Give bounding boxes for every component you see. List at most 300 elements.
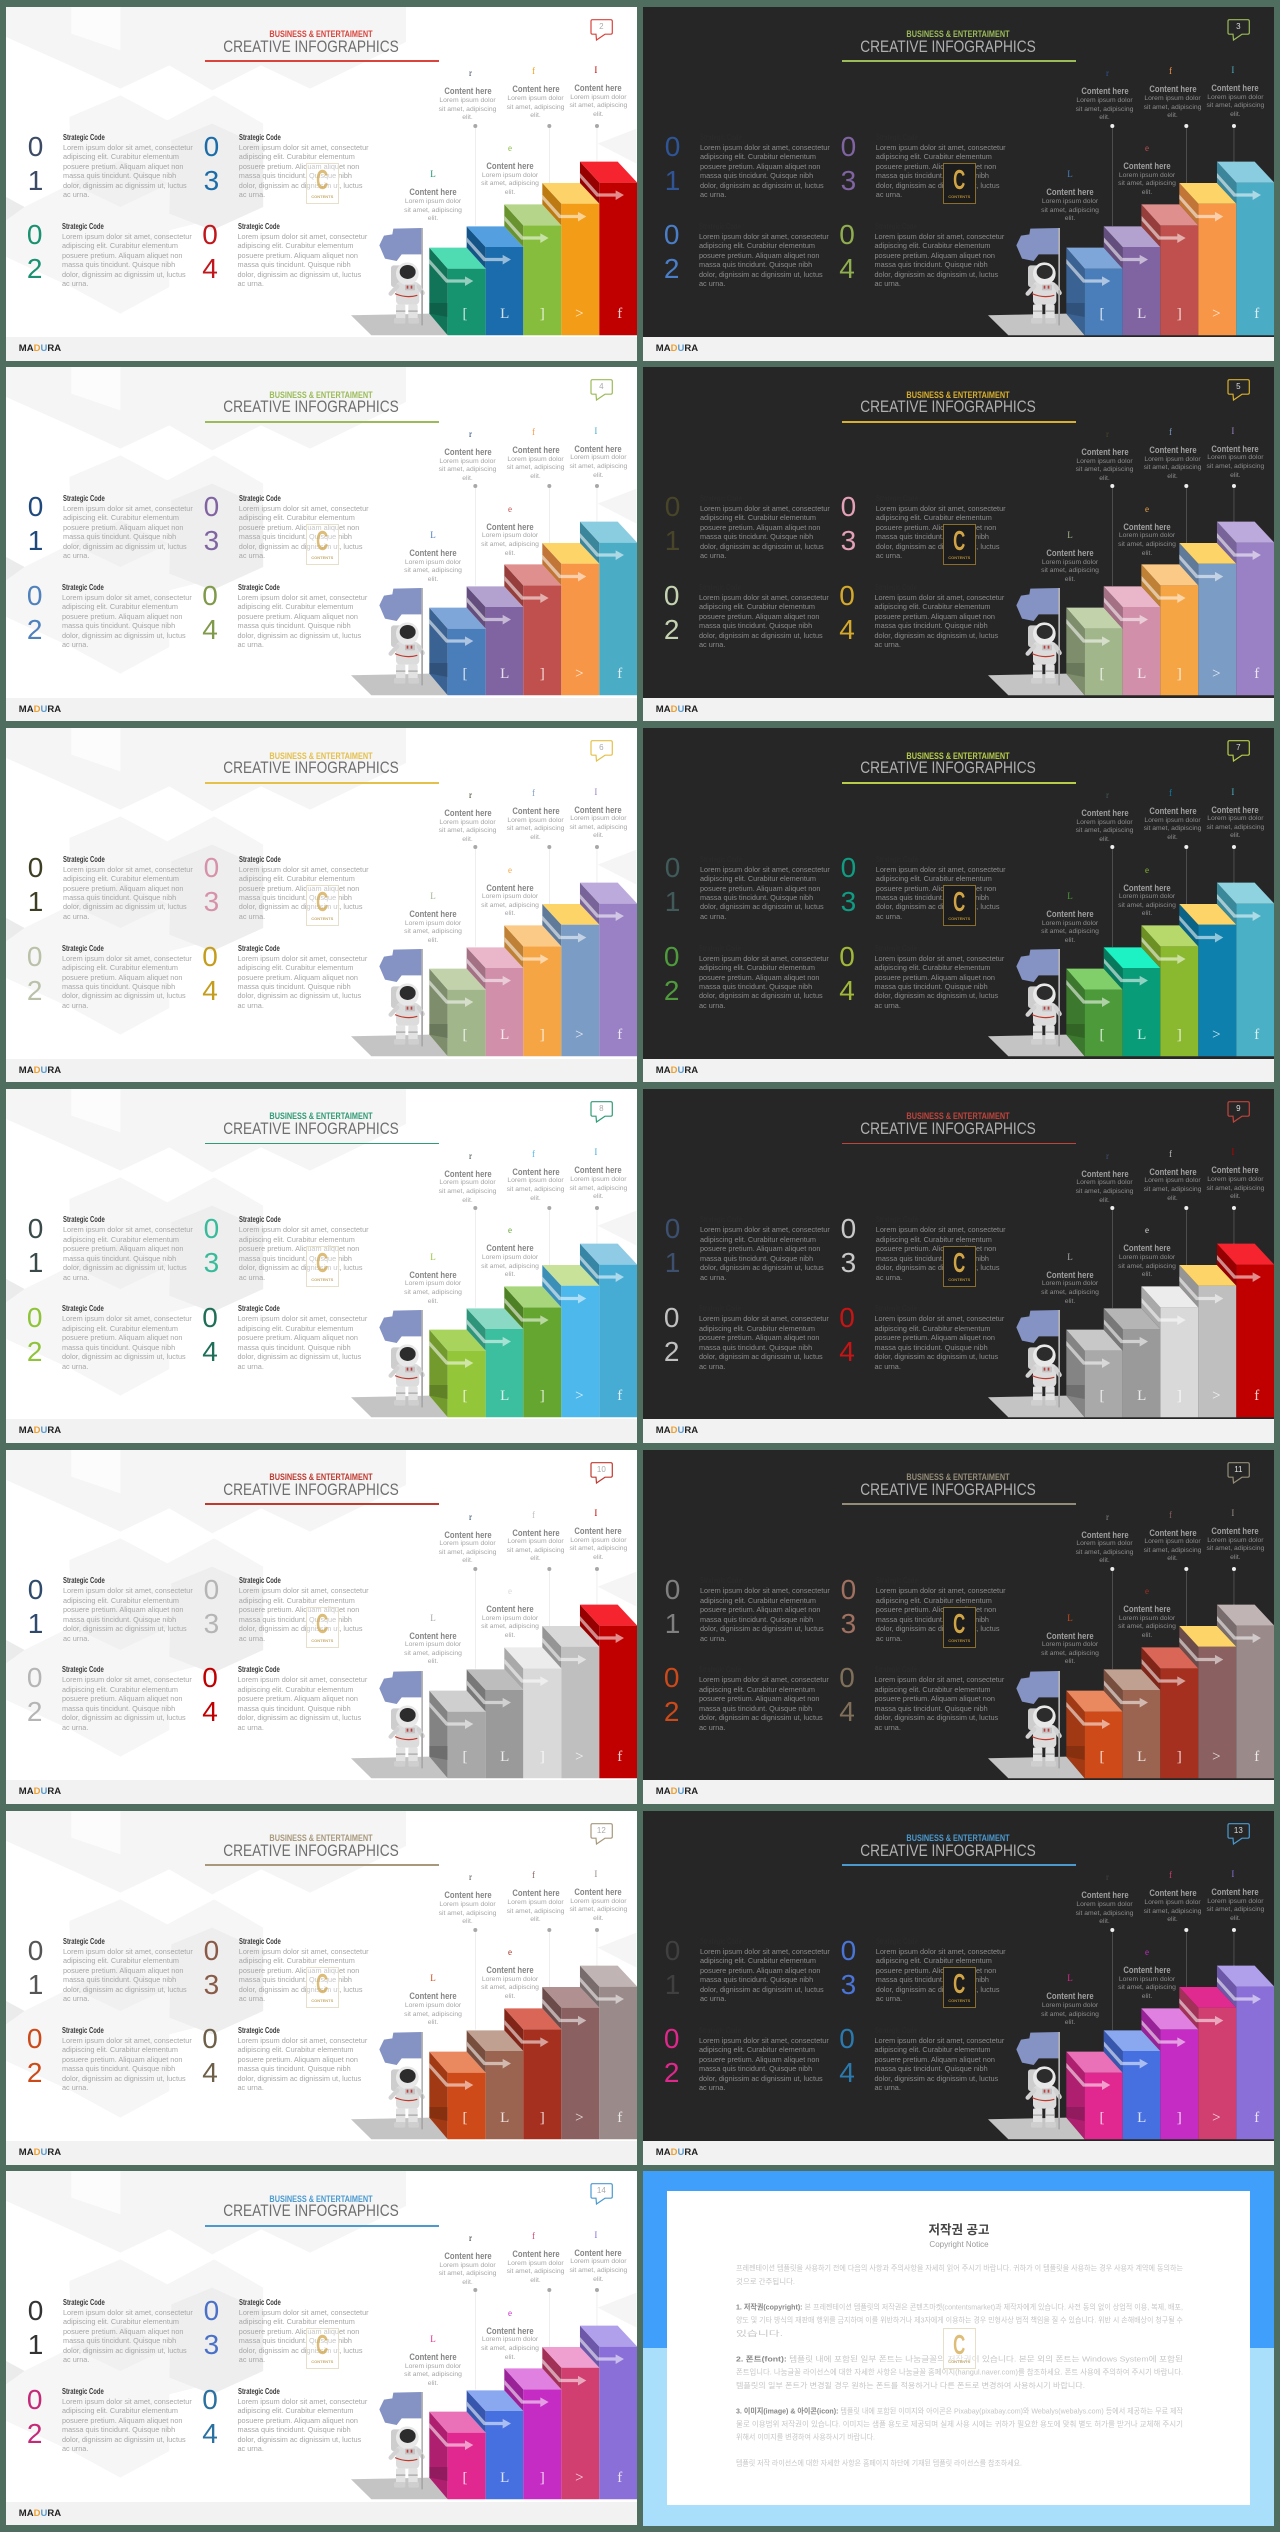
callout 1: Content here xyxy=(409,187,457,197)
text block 03 xyxy=(239,133,369,199)
text block 04 xyxy=(874,222,1004,288)
text block 01 xyxy=(63,2298,213,2365)
callout 1: Content here xyxy=(409,1270,457,1280)
number 01 xyxy=(658,1934,688,2002)
text block 02: dolor, dignissim ac dignissim ut, luctus xyxy=(699,991,823,1000)
number 04 xyxy=(195,579,225,647)
text block 02: massa quis tincidunt. Quisque nibh xyxy=(62,1343,175,1352)
watermark: C xyxy=(316,1608,328,1639)
callout 2: elit. xyxy=(462,2279,473,2286)
callout 4 xyxy=(496,427,576,482)
page number bubble: 8 xyxy=(599,1104,604,1113)
number 02: 2 xyxy=(664,1696,679,1727)
text block 03: ac urna. xyxy=(239,1634,265,1642)
number 02: 0 xyxy=(664,2023,679,2054)
callout 5: sit amet, adipiscing xyxy=(1206,1906,1264,1913)
text block 03 xyxy=(239,1937,389,2004)
number 03: 0 xyxy=(841,491,856,522)
callout 2: r xyxy=(469,1151,472,1161)
text block 01: Lorem ipsum dolor sit amet, consectetur xyxy=(700,865,830,874)
callout 1 xyxy=(1041,169,1099,222)
callout 3 xyxy=(1118,143,1176,196)
panel: slide 7 xyxy=(643,728,1274,1082)
text block 01: posuere pretium. Aliquam aliquet non xyxy=(63,162,183,171)
callout 2: sit amet, adipiscing xyxy=(439,466,496,473)
footer: MADURA xyxy=(656,2147,698,2158)
text block 01: Lorem ipsum dolor sit amet, consectetur xyxy=(700,1947,830,1956)
stair chart with astronaut xyxy=(643,728,1274,1082)
text block 03: Lorem ipsum dolor sit amet, consectetur xyxy=(876,143,1006,152)
notice text: 위해서 이미지를 변경하여 사용하시기 바랍니다. xyxy=(736,2432,875,2442)
text block 02: posuere pretium. Aliquam aliquet non xyxy=(62,2055,182,2064)
bar icons: > xyxy=(1212,1749,1221,1765)
text block 02: dolor, dignissim ac dignissim ut, luctus xyxy=(699,1352,823,1361)
callout 4: sit amet, adipiscing xyxy=(1144,464,1201,471)
callout 1: Lorem ipsum dolor xyxy=(1042,2002,1098,2009)
number 04: 4 xyxy=(202,2057,218,2088)
number 04 xyxy=(195,2022,225,2090)
watermark xyxy=(306,524,338,565)
callout 2 xyxy=(428,1512,508,1566)
callout 2: r xyxy=(469,2233,472,2243)
callout 1: Content here xyxy=(1046,909,1094,919)
text block 02: dolor, dignissim ac dignissim ut, luctus xyxy=(699,631,823,640)
bar icons xyxy=(455,1027,636,1045)
text block 03: dolor, dignissim ac dignissim ut, luctus xyxy=(239,1624,362,1633)
callout 4: f xyxy=(532,788,535,798)
callout 5: elit. xyxy=(1230,472,1241,479)
callout 4: elit. xyxy=(1167,1916,1178,1923)
callout 4: elit. xyxy=(1167,473,1178,480)
callout 3 xyxy=(1107,1225,1187,1280)
callout 3: Lorem ipsum dolor xyxy=(482,1254,538,1261)
number 01: 0 xyxy=(665,1213,680,1244)
panel: slide 4 xyxy=(6,367,637,721)
callout 2: sit amet, adipiscing xyxy=(439,1188,496,1195)
callout 5: I xyxy=(594,1508,597,1518)
text block 01 xyxy=(700,1576,850,1643)
text block 03 xyxy=(239,2298,389,2365)
title xyxy=(842,388,1076,422)
text block 01: dolor, dignissim ac dignissim ut, luctus xyxy=(63,542,187,551)
callout 3: Lorem ipsum dolor xyxy=(482,2336,538,2343)
text block 04: adipiscing elit. Curabitur elementum xyxy=(238,241,354,250)
number 03: 0 xyxy=(204,1574,219,1605)
text block 02: posuere pretium. Aliquam aliquet non xyxy=(699,1694,819,1703)
text block 01 xyxy=(63,1576,213,1643)
page number bubble: 9 xyxy=(1236,1104,1241,1113)
text block 02: posuere pretium. Aliquam aliquet non xyxy=(699,612,819,621)
number 04: 0 xyxy=(839,580,855,611)
callout 3: elit. xyxy=(505,550,515,557)
text block 01: ac urna. xyxy=(700,1994,726,2003)
callout 1: sit amet, adipiscing xyxy=(404,1289,462,1296)
footer xyxy=(6,1780,637,1804)
text block 04: dolor, dignissim ac dignissim ut, luctus xyxy=(238,631,361,640)
watermark xyxy=(306,1246,338,1287)
text block 01: ac urna. xyxy=(700,912,726,921)
footer xyxy=(643,2141,1274,2165)
callout 4: f xyxy=(1169,1870,1172,1880)
watermark: CONTENTS xyxy=(311,916,333,921)
page number bubble xyxy=(590,1101,614,1123)
callout 1: Content here xyxy=(409,548,457,558)
number 04: 0 xyxy=(202,2384,218,2415)
text block 03: posuere pretium. Aliquam aliquet non xyxy=(239,523,359,532)
number 04: 4 xyxy=(202,614,218,645)
number 01: 1 xyxy=(28,165,43,196)
callout 5: Lorem ipsum dolor xyxy=(570,1537,627,1544)
callout 1: L xyxy=(1067,1973,1073,1983)
text block 01: dolor, dignissim ac dignissim ut, luctus xyxy=(700,1624,824,1633)
number 02: 0 xyxy=(664,219,679,250)
text block 04: posuere pretium. Aliquam aliquet non xyxy=(238,1333,358,1342)
number 02: 0 xyxy=(664,580,679,611)
text block 04: adipiscing elit. Curabitur elementum xyxy=(874,963,990,972)
text block 02: Strategic Code xyxy=(699,583,741,592)
watermark xyxy=(943,885,976,926)
number 03: 0 xyxy=(204,131,219,162)
callout 1: sit amet, adipiscing xyxy=(404,2371,462,2378)
text block 01: ac urna. xyxy=(63,551,89,560)
callout 4: Content here xyxy=(1149,1888,1196,1898)
text block 01: Strategic Code xyxy=(63,1576,105,1585)
text block 01 xyxy=(63,1937,213,2004)
callout 2: r xyxy=(1106,68,1109,78)
page number bubble xyxy=(1227,379,1251,401)
text block 04: massa quis tincidunt. Quisque nibh xyxy=(238,2425,351,2434)
bar icons xyxy=(455,1388,636,1406)
callout 4: f xyxy=(532,66,535,76)
watermark xyxy=(943,1967,976,2008)
callout 1 xyxy=(393,891,473,945)
callout 1: L xyxy=(1067,530,1073,540)
text block 02: adipiscing elit. Curabitur elementum xyxy=(699,602,815,611)
bar icons: f xyxy=(617,1388,622,1404)
white notice sheet xyxy=(666,2191,1250,2505)
text block 02 xyxy=(62,1304,212,1371)
text block 01: dolor, dignissim ac dignissim ut, luctus xyxy=(700,902,824,911)
watermark: C xyxy=(316,164,328,195)
callout 5: Content here xyxy=(575,83,622,93)
text block 02: Strategic Code xyxy=(699,944,741,953)
text block 04: adipiscing elit. Curabitur elementum xyxy=(238,963,354,972)
text block 04: adipiscing elit. Curabitur elementum xyxy=(238,1324,354,1333)
callout 5: sit amet, adipiscing xyxy=(569,1545,627,1552)
bar icons: > xyxy=(1212,1388,1221,1404)
number 01: 0 xyxy=(28,852,43,883)
callout 3: e xyxy=(1145,1225,1149,1235)
number 03: 3 xyxy=(204,525,219,556)
callout 3: e xyxy=(508,143,512,153)
callout 5: Lorem ipsum dolor xyxy=(1207,1176,1264,1183)
number 02: 2 xyxy=(27,253,42,284)
title: BUSINESS & ENTERTAIMENT xyxy=(269,29,373,39)
footer: MADURA xyxy=(19,343,61,354)
callout 5: elit. xyxy=(593,1193,604,1200)
callout 5: elit. xyxy=(1230,832,1241,839)
text block 03: adipiscing elit. Curabitur elementum xyxy=(876,874,992,883)
callout 4: Lorem ipsum dolor xyxy=(1144,456,1201,463)
callout 1: sit amet, adipiscing xyxy=(1041,567,1099,574)
callout 5: Lorem ipsum dolor xyxy=(1207,454,1264,461)
callout 5 xyxy=(1195,787,1275,841)
text block 04 xyxy=(238,1665,388,1732)
footer xyxy=(6,2502,637,2526)
text block 03: dolor, dignissim ac dignissim ut, luctus xyxy=(239,1985,362,1994)
callout 5: I xyxy=(594,426,597,436)
text block 03: ac urna. xyxy=(876,912,902,921)
callout 4: Lorem ipsum dolor xyxy=(1144,817,1201,824)
number 04: 0 xyxy=(839,2023,855,2054)
callout 3: Content here xyxy=(486,2326,534,2336)
callout 1: Content here xyxy=(409,1991,457,2001)
text block 04: adipiscing elit. Curabitur elementum xyxy=(874,2045,990,2054)
text block 04: dolor, dignissim ac dignissim ut, luctus xyxy=(238,2435,361,2444)
text block 03: ac urna. xyxy=(239,1273,265,1282)
callout 4: Content here xyxy=(512,1888,559,1898)
callout 5: I xyxy=(1231,65,1234,75)
text block 03 xyxy=(876,855,1026,921)
callout 1: Lorem ipsum dolor xyxy=(405,559,461,566)
callout 2: Lorem ipsum dolor xyxy=(439,458,496,465)
text block 01: Strategic Code xyxy=(63,2298,105,2307)
callout 2: elit. xyxy=(1099,1197,1110,1204)
text block 03: massa quis tincidunt. Quisque nibh xyxy=(876,171,989,180)
callout 2: Lorem ipsum dolor xyxy=(439,1540,496,1547)
text block 02: massa quis tincidunt. Quisque nibh xyxy=(699,2064,812,2073)
callout 4: elit. xyxy=(530,1555,541,1562)
stair chart with astronaut xyxy=(643,1811,1274,2165)
callout 4: sit amet, adipiscing xyxy=(1144,825,1201,832)
footer xyxy=(6,2141,637,2165)
text block 02: massa quis tincidunt. Quisque nibh xyxy=(62,260,175,269)
text block 03: adipiscing elit. Curabitur elementum xyxy=(876,1235,992,1244)
bar icons: L xyxy=(1137,1749,1146,1765)
text block 01: dolor, dignissim ac dignissim ut, luctus xyxy=(63,1263,187,1272)
text block 02: ac urna. xyxy=(699,640,725,649)
text block 02: Lorem ipsum dolor sit amet, consectetur xyxy=(62,2397,192,2406)
callout 5: Content here xyxy=(575,805,622,815)
callout 4: f xyxy=(532,2231,535,2241)
text block 01: posuere pretium. Aliquam aliquet non xyxy=(700,1244,820,1253)
text block 03: Strategic Code xyxy=(239,494,281,503)
callout 5: sit amet, adipiscing xyxy=(1206,463,1264,470)
callout 4: Lorem ipsum dolor xyxy=(1144,1177,1201,1184)
text block 03: posuere pretium. Aliquam aliquet non xyxy=(239,884,359,892)
text block 01: adipiscing elit. Curabitur elementum xyxy=(63,1235,179,1244)
text block 04: dolor, dignissim ac dignissim ut, luctus xyxy=(238,2074,361,2083)
number 01: 1 xyxy=(28,2329,43,2360)
callout 3: Lorem ipsum dolor xyxy=(482,1976,538,1983)
callout 4 xyxy=(496,1510,576,1564)
callout 2: Content here xyxy=(444,1169,491,1179)
number 01: 1 xyxy=(665,525,680,556)
callout 1: elit. xyxy=(428,2019,438,2026)
text block 01: Lorem ipsum dolor sit amet, consectetur xyxy=(63,143,193,152)
text block 03: adipiscing elit. Curabitur elementum xyxy=(239,2317,355,2326)
text block 04 xyxy=(238,583,388,650)
text block 04: adipiscing elit. Curabitur elementum xyxy=(874,1324,990,1333)
bar icons xyxy=(1092,2110,1273,2128)
title: BUSINESS & ENTERTAIMENT xyxy=(269,2194,373,2204)
callout 5: Lorem ipsum dolor xyxy=(570,1898,627,1905)
text block 03: adipiscing elit. Curabitur elementum xyxy=(239,1596,355,1605)
number 04 xyxy=(832,1301,862,1369)
number 01 xyxy=(658,1212,688,1280)
number 03 xyxy=(196,851,226,919)
watermark: CONTENTS xyxy=(948,555,970,560)
bar icons: [ xyxy=(462,666,468,682)
text block 04: ac urna. xyxy=(238,1362,264,1371)
text block 02: posuere pretium. Aliquam aliquet non xyxy=(699,2055,819,2064)
text block 01: ac urna. xyxy=(700,1273,726,1282)
page number bubble xyxy=(590,2183,614,2205)
background pattern xyxy=(6,728,637,1082)
text block 02: Lorem ipsum dolor sit amet, consectetur xyxy=(62,954,192,963)
callout 3: e xyxy=(508,504,512,514)
text block 04: dolor, dignissim ac dignissim ut, luctus xyxy=(874,1713,998,1722)
number 02: 0 xyxy=(27,2023,42,2054)
page number bubble: 12 xyxy=(597,1826,606,1835)
callout 4 xyxy=(496,1149,576,1203)
callout 1: L xyxy=(430,891,436,901)
callout 2: Content here xyxy=(444,808,491,818)
callout 5: Lorem ipsum dolor xyxy=(1207,94,1264,101)
text block 04: massa quis tincidunt. Quisque nibh xyxy=(874,982,988,991)
bar icons: L xyxy=(500,2110,509,2126)
callout 3: e xyxy=(1145,1586,1149,1596)
watermark xyxy=(306,1607,338,1648)
number 02: 2 xyxy=(664,1336,679,1367)
bar icons: [ xyxy=(462,2470,468,2486)
callout 3: Content here xyxy=(486,883,534,893)
text block 01: adipiscing elit. Curabitur elementum xyxy=(700,874,816,883)
callout 2: Lorem ipsum dolor xyxy=(439,97,496,104)
callout 5: I xyxy=(1231,787,1234,797)
number 03 xyxy=(833,1212,863,1280)
notice text: 1. 저작권(copyright): 본 프레젠테이션 템플릿의 저작권은 콘텐츠마켓(contentsmarket)과 제작자에게 있습니다. 사전 동의 없이 상업적 이용, 복제, 배포, xyxy=(736,2302,1183,2312)
panel: slide 11 xyxy=(643,1450,1274,1804)
text block 02: adipiscing elit. Curabitur elementum xyxy=(62,1685,178,1694)
callout 3 xyxy=(481,143,539,196)
callout 5: Content here xyxy=(575,2248,622,2258)
bar icons: > xyxy=(1212,306,1221,322)
number 02 xyxy=(657,940,687,1008)
number 01 xyxy=(28,491,43,556)
stair chart with astronaut xyxy=(988,124,1274,336)
text block 01 xyxy=(63,133,193,199)
number 04 xyxy=(202,219,218,284)
number 04: 0 xyxy=(839,941,855,972)
callout 1: Content here xyxy=(409,2352,457,2362)
text block 03: dolor, dignissim ac dignissim ut, luctus xyxy=(239,902,362,911)
callout 4: elit. xyxy=(1167,834,1178,841)
text block 01: Lorem ipsum dolor sit amet, consectetur xyxy=(700,1225,830,1234)
text block 02: ac urna. xyxy=(62,2083,88,2092)
text block 02 xyxy=(62,222,192,288)
text block 01: adipiscing elit. Curabitur elementum xyxy=(700,152,816,161)
text block 02: Lorem ipsum dolor sit amet, consectetur xyxy=(62,232,192,241)
panel: slide 9 xyxy=(643,1089,1274,1443)
watermark xyxy=(306,885,338,926)
title: CREATIVE INFOGRAPHICS xyxy=(860,1120,1036,1138)
title: CREATIVE INFOGRAPHICS xyxy=(860,759,1036,777)
callout 2 xyxy=(1064,790,1144,844)
text block 04: massa quis tincidunt. Quisque nibh xyxy=(238,982,351,991)
stair chart with astronaut xyxy=(6,728,637,1082)
callout 1 xyxy=(1030,1613,1110,1667)
number 01: 0 xyxy=(28,1213,43,1244)
number 03: 3 xyxy=(841,1247,856,1278)
bar icons: ] xyxy=(540,306,545,322)
number 01: 1 xyxy=(28,525,43,556)
number 03: 3 xyxy=(841,525,856,556)
text block 02: posuere pretium. Aliquam aliquet non xyxy=(699,1333,819,1342)
text block 01: posuere pretium. Aliquam aliquet non xyxy=(63,884,183,892)
number 01: 0 xyxy=(28,491,43,522)
number 02: 2 xyxy=(664,614,679,645)
callout 1: elit. xyxy=(428,1298,438,1305)
callout 2 xyxy=(1064,1512,1144,1566)
callout 3: Content here xyxy=(486,1243,534,1253)
callout 2 xyxy=(1064,1872,1144,1927)
callout 2: sit amet, adipiscing xyxy=(439,2270,496,2277)
text block 04: Lorem ipsum dolor sit amet, consectetur xyxy=(238,593,367,602)
callout 4: elit. xyxy=(530,1916,541,1923)
text block 04 xyxy=(874,944,1024,1010)
callout 3: Content here xyxy=(1123,883,1171,893)
callout 5: sit amet, adipiscing xyxy=(569,1185,627,1192)
footer: MADURA xyxy=(19,2508,61,2519)
text block 01: dolor, dignissim ac dignissim ut, luctus xyxy=(63,2346,187,2355)
callout 2: elit. xyxy=(1099,1918,1110,1925)
number 03 xyxy=(196,1934,226,2002)
footer: MADURA xyxy=(19,1065,61,1076)
stair chart with astronaut xyxy=(6,367,637,721)
text block 04: adipiscing elit. Curabitur elementum xyxy=(874,241,990,250)
text block 01: Lorem ipsum dolor sit amet, consectetur xyxy=(63,1586,193,1595)
text block 01: ac urna. xyxy=(63,912,89,921)
text block 03: ac urna. xyxy=(876,551,902,560)
callout 3: e xyxy=(1145,865,1149,875)
watermark: CONTENTS xyxy=(311,194,333,199)
background pattern xyxy=(6,2171,637,2525)
number 04: 0 xyxy=(202,2023,218,2054)
watermark: CONTENTS xyxy=(948,194,970,199)
text block 01: ac urna. xyxy=(63,1994,89,2003)
callout 4: sit amet, adipiscing xyxy=(507,104,564,111)
text block 04: massa quis tincidunt. Quisque nibh xyxy=(238,1704,351,1713)
callout 5: elit. xyxy=(1230,1193,1241,1200)
footer: MADURA xyxy=(656,1786,698,1797)
text block 04: posuere pretium. Aliquam aliquet non xyxy=(874,612,995,621)
number 01 xyxy=(20,1934,50,2002)
text block 02: posuere pretium. Aliquam aliquet non xyxy=(699,972,819,982)
callout 1: L xyxy=(430,169,436,179)
bar icons: > xyxy=(1212,1027,1221,1043)
number 04 xyxy=(195,1661,225,1729)
callout 5: Lorem ipsum dolor xyxy=(570,1176,627,1183)
text block 01: Strategic Code xyxy=(63,494,105,503)
number 04 xyxy=(839,219,855,284)
text block 02: posuere pretium. Aliquam aliquet non xyxy=(62,1333,182,1342)
text block 01: ac urna. xyxy=(63,1634,89,1642)
text block 02: posuere pretium. Aliquam aliquet non xyxy=(62,2416,182,2425)
text block 03: ac urna. xyxy=(876,1634,902,1642)
callout 1: Lorem ipsum dolor xyxy=(1042,198,1098,205)
page number bubble: 2 xyxy=(599,22,604,31)
